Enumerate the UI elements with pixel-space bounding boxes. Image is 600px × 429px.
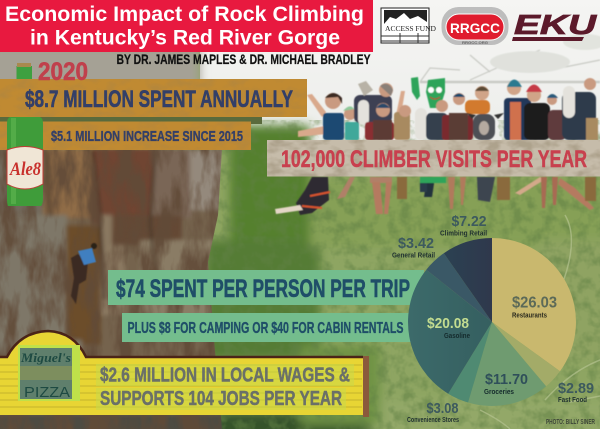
person: blue cap — [547, 94, 566, 140]
band: camping or cabin — [122, 313, 414, 342]
band: $8.7 million — [0, 79, 307, 117]
slice: fast food — [492, 322, 560, 386]
sign picture: Miguel's — [20, 350, 71, 365]
slice: climbing retail — [444, 238, 492, 322]
slice: convenience stores — [448, 322, 492, 402]
climber on rock — [71, 243, 97, 304]
dog — [467, 113, 504, 140]
person: orange hoodie — [465, 86, 490, 114]
cat held up — [415, 108, 427, 140]
person: scarf woman — [442, 93, 473, 140]
wages text — [96, 364, 354, 410]
pizza sign — [0, 331, 369, 417]
pie label: general retail: $3.42 — [398, 235, 434, 252]
pie label: climbing retail: $7.22 — [452, 213, 486, 230]
pie label: gasoline — [427, 315, 470, 340]
pie label: gasoline: Gasoline — [444, 333, 470, 340]
pie label: convenience stores: $3.08 — [426, 400, 458, 417]
slice: groceries — [468, 322, 546, 406]
person: woman in red scarf — [365, 103, 394, 140]
person: raised arm — [394, 91, 411, 140]
band: $74 per person: $74 SPENT PER PERSON PER TRIP — [116, 275, 410, 303]
pie chart: spending per person — [408, 238, 576, 406]
person: right edge — [586, 118, 598, 140]
pie label: fast food — [558, 380, 594, 404]
pie label: general retail: General Retail — [392, 252, 435, 260]
band: $5.1 million increase: $5.1 MILLION INCREASE SINCE 2015 — [51, 128, 243, 145]
person: dark jacket — [426, 100, 448, 140]
person: red helmet — [524, 84, 550, 140]
icon: green soda bottle: Ale8 — [9, 159, 41, 180]
title banner — [0, 0, 373, 52]
pie label: fast food: $2.89 — [558, 380, 594, 397]
sign picture: PIZZA — [24, 384, 70, 401]
pie label: restaurants — [512, 294, 557, 320]
icon: green soda bottle — [7, 117, 43, 206]
logo: Access Fund: ACCESS FUND — [385, 24, 437, 33]
slice: general retail — [426, 253, 492, 322]
bottle neck — [16, 63, 32, 80]
title banner: Economic Impact of Rock Climbing — [5, 3, 364, 26]
pie label: groceries: Groceries — [484, 389, 514, 396]
band: $5.1 million increase — [0, 122, 251, 150]
pie label: groceries — [484, 371, 528, 396]
pie label: restaurants: $26.03 — [512, 294, 557, 312]
foliage texture — [205, 120, 600, 429]
pie label: general retail — [392, 235, 435, 260]
title banner: in Kentucky’s Red River Gorge — [30, 26, 340, 50]
pie label: groceries: $11.70 — [485, 371, 528, 388]
logo: RRGCC — [442, 7, 508, 45]
pie label: climbing retail — [440, 213, 487, 238]
wages text: SUPPORTS 104 JOBS PER YEAR — [100, 388, 342, 410]
misty tree — [420, 34, 600, 82]
rock wall — [0, 148, 226, 429]
band: camping or cabin: PLUS $8 FOR CAMPING OR $40 FOR CABIN RENTALS — [128, 320, 404, 337]
band: $8.7 million: $8.7 MILLION SPENT ANNUALLY — [25, 86, 293, 113]
climbers group photo — [298, 77, 598, 140]
pie label: convenience stores — [407, 400, 459, 424]
pie label: convenience stores: Convenience Stores — [407, 417, 459, 424]
pie label: gasoline: $20.08 — [427, 315, 469, 332]
byline: BY DR. JAMES MAPLES & DR. MICHAEL BRADLEY — [116, 51, 371, 67]
Gumby — [411, 77, 445, 108]
logo: EKU: EKU — [514, 9, 597, 40]
pie label: restaurants: Restaurants — [512, 312, 547, 320]
person: blue helmet — [504, 80, 531, 140]
sign picture — [18, 345, 80, 401]
pie label: fast food: Fast Food — [558, 397, 587, 404]
hillside streaks — [480, 215, 600, 429]
person: woman holding cat — [354, 81, 393, 125]
mottled strip above second band — [0, 116, 262, 124]
logo: RRGCC: RRGCC — [450, 20, 500, 36]
band: $74 per person — [108, 270, 424, 305]
slice: gasoline — [408, 270, 492, 394]
logo: RRGCC: RRGCC.ORG — [462, 40, 488, 45]
person: child in teal — [343, 106, 359, 140]
fallen climber and legs — [275, 177, 596, 215]
logo: Access Fund — [381, 8, 437, 43]
logo: EKU — [512, 9, 597, 41]
pie label: climbing retail: Climbing Retail — [440, 230, 487, 238]
person: man in blue shirt — [298, 93, 344, 140]
slice: restaurants — [492, 238, 576, 371]
person: woman with cat — [562, 78, 596, 140]
wages text: $2.6 MILLION IN LOCAL WAGES & — [100, 364, 350, 386]
year label 2020: 2020 — [38, 58, 88, 86]
